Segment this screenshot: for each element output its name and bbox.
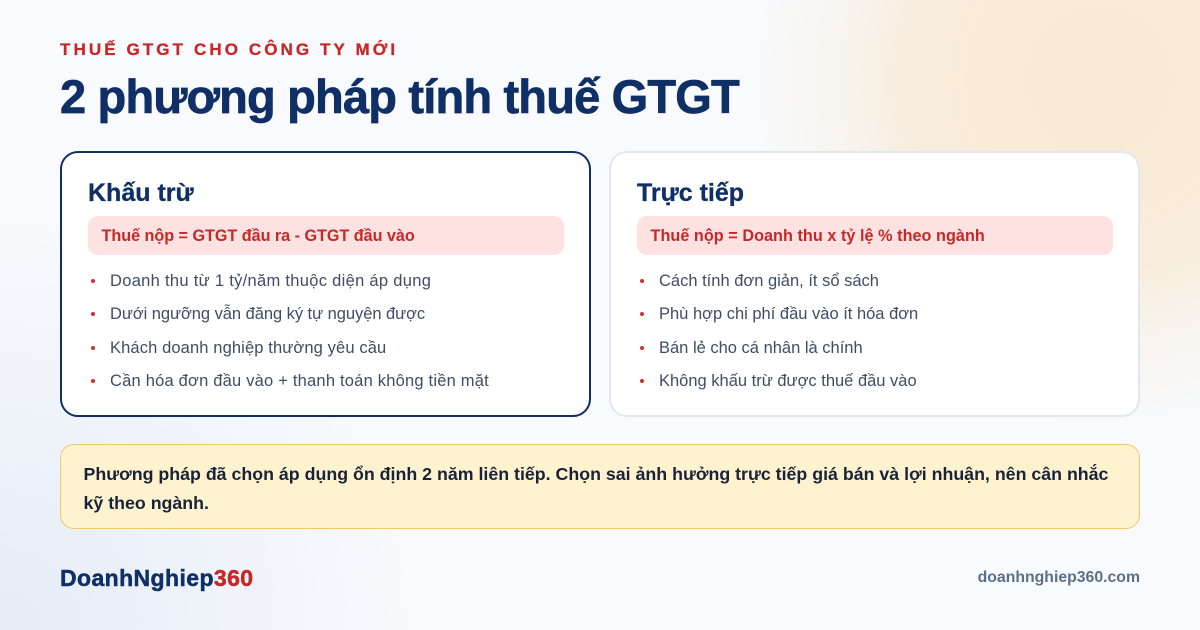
formula: Trực tiếp: Thuế nộp = Doanh thu x tỷ lệ % theo ngành xyxy=(650,227,985,245)
brand logo: DoanhNghiep360 xyxy=(60,565,253,591)
website: doanhnghiep360.com xyxy=(978,569,1140,586)
callout xyxy=(60,444,1140,529)
formula: Trực tiếp xyxy=(637,216,1113,255)
list item 2: Phù hợp chi phí đầu vào ít hóa đơn xyxy=(659,305,918,323)
list item 4: Không khấu trừ được thuế đầu vào xyxy=(659,372,917,390)
formula: Khấu trừ: Thuế nộp = GTGT đầu ra - GTGT đầu vào xyxy=(102,227,415,245)
heading: Khấu trừ: Khấu trừ xyxy=(88,179,194,207)
list item 4: Cần hóa đơn đầu vào + thanh toán không tiền mặt xyxy=(110,372,489,390)
eyebrow heading: THUẾ GTGT CHO CÔNG TY MỚI xyxy=(60,40,398,59)
heading: Trực tiếp: Trực tiếp xyxy=(637,179,744,207)
callout: kỹ theo ngành. xyxy=(84,492,209,512)
list item 1: Cách tính đơn giản, ít sổ sách xyxy=(659,272,879,290)
formula: Khấu trừ xyxy=(88,216,564,255)
list item 3: Khách doanh nghiệp thường yêu cầu xyxy=(110,339,386,357)
panel: Khấu trừ xyxy=(60,151,591,417)
list item 1: Doanh thu từ 1 tỷ/năm thuộc diện áp dụng xyxy=(110,272,431,290)
list item 2: Dưới ngưỡng vẫn đăng ký tự nguyện được xyxy=(110,305,425,323)
panel: Trực tiếp xyxy=(609,151,1140,417)
list item 3: Bán lẻ cho cá nhân là chính xyxy=(659,339,863,357)
title: 2 phương pháp tính thuế GTGT xyxy=(60,70,739,123)
callout: Phương pháp đã chọn áp dụng ổn định 2 năm liên tiếp. Chọn sai ảnh hưởng trực tiếp giá bán và lợi nhuận, nên cân nhắc xyxy=(84,464,1108,484)
